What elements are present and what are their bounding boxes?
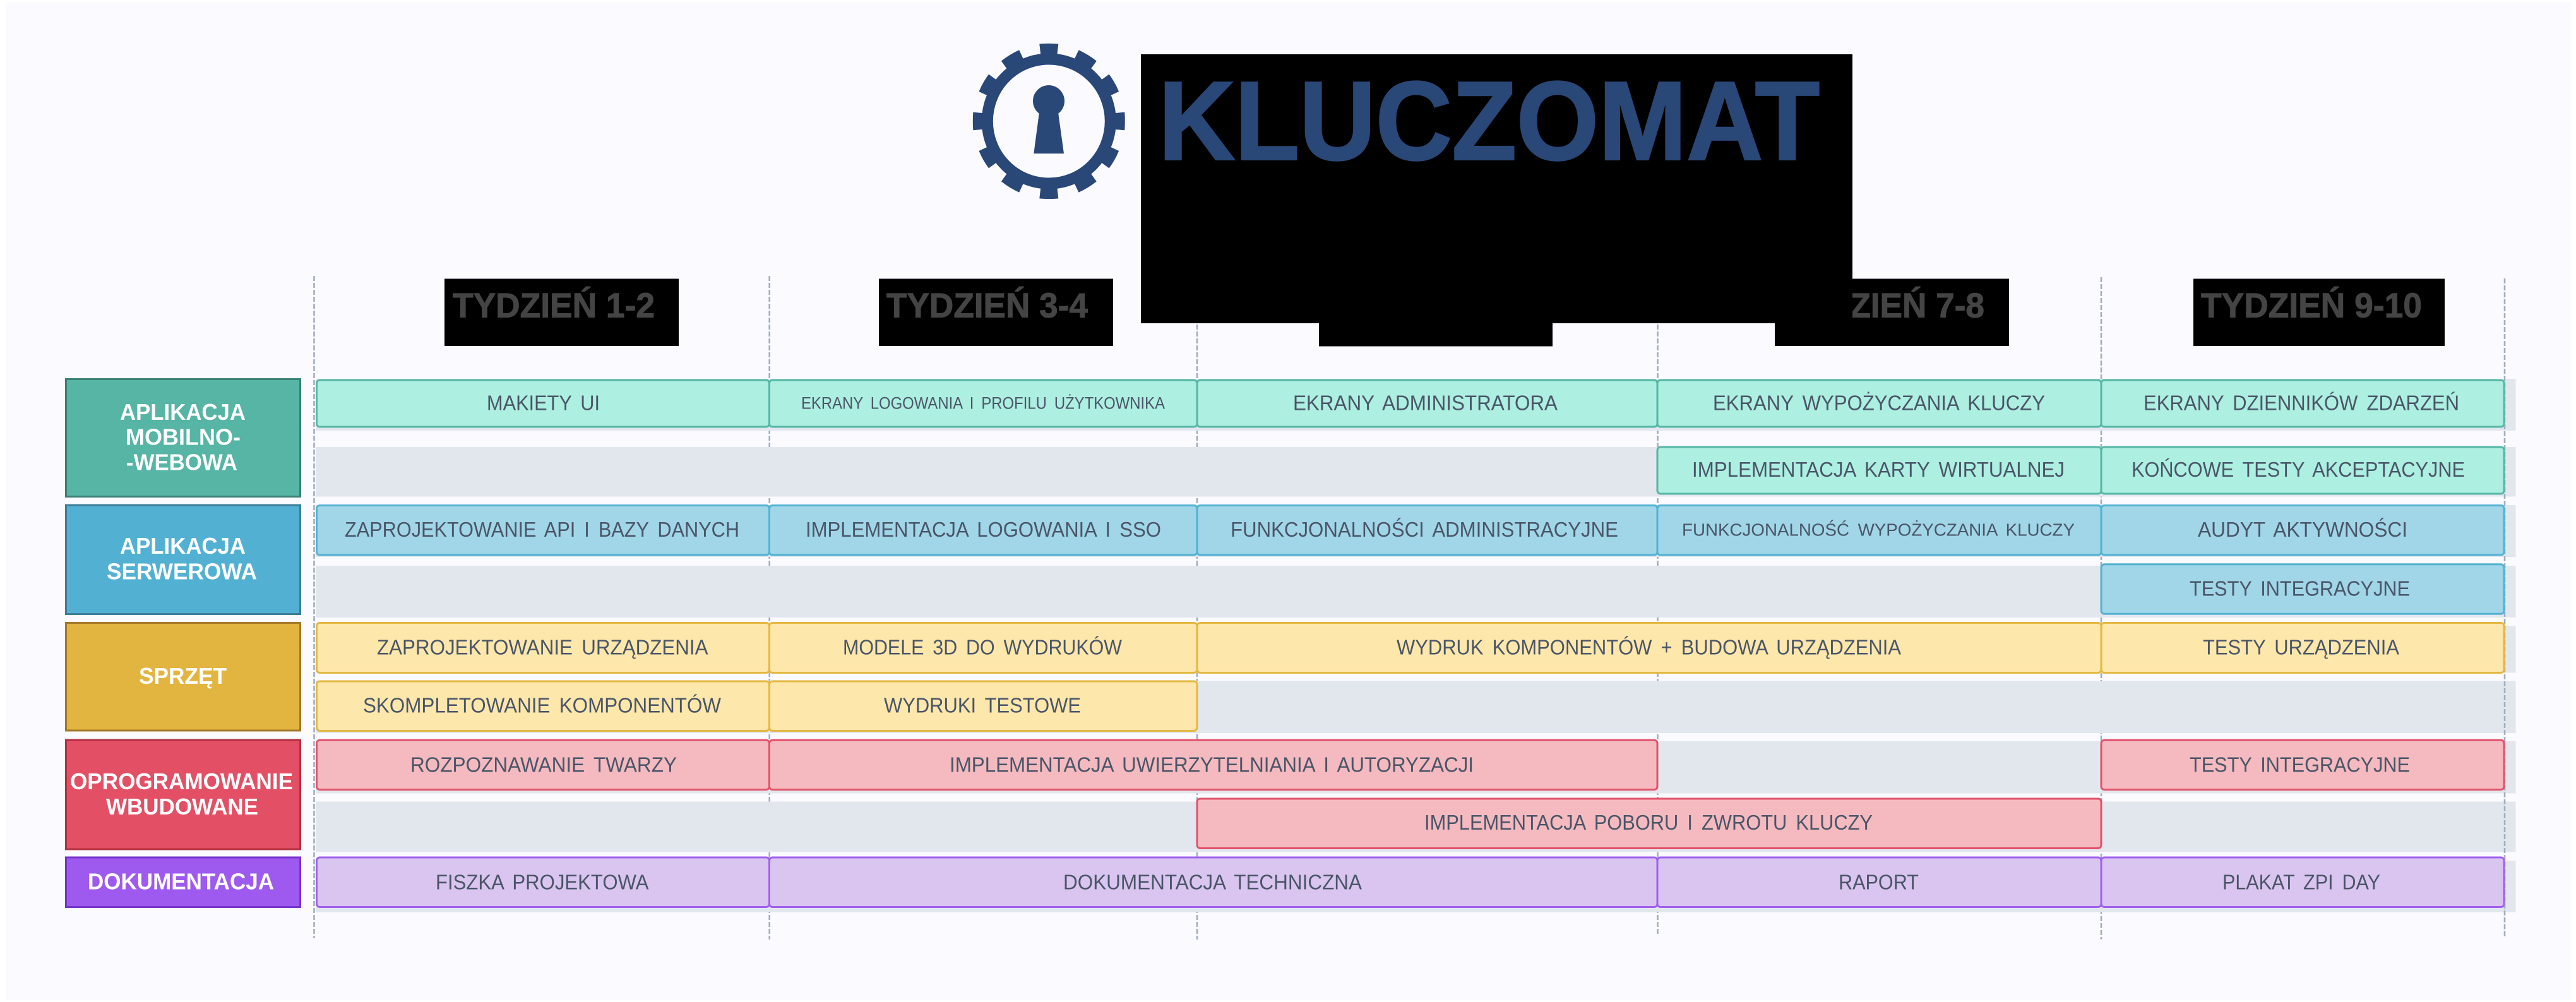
task: TESTY INTEGRACYJNE (serwer): TESTY INTEGRACYJNE [2190, 577, 2410, 601]
task: DOKUMENTACJA TECHNICZNA [769, 857, 1657, 907]
task: FUNKCJONALNOŚCI ADMINISTRACYJNE: FUNKCJONALNOŚCI ADMINISTRACYJNE [1231, 517, 1618, 542]
task: IMPLEMENTACJA KARTY WIRTUALNEJ: IMPLEMENTACJA KARTY WIRTUALNEJ [1692, 458, 2065, 482]
track rows background [316, 379, 2515, 912]
task: FUNKCJONALNOŚCI ADMINISTRACYJNE [1197, 505, 1657, 555]
task: EKRANY LOGOWANIA I PROFILU UŻYTKOWNIKA [769, 380, 1197, 427]
task: TESTY INTEGRACYJNE (oprogramowanie) [2101, 740, 2504, 790]
task: ZAPROJEKTOWANIE URZĄDZENIA [317, 623, 769, 673]
category: DOKUMENTACJA [66, 857, 301, 907]
category: SPRZĘT [66, 623, 301, 731]
task: AUDYT AKTYWNOŚCI: AUDYT AKTYWNOŚCI [2198, 517, 2407, 542]
task: ROZPOZNAWANIE TWARZY: ROZPOZNAWANIE TWARZY [410, 753, 677, 777]
category: OPROGRAMOWANIE WBUDOWANE: WBUDOWANE [106, 794, 258, 820]
task: TESTY URZĄDZENIA [2101, 623, 2504, 673]
task: MODELE 3D DO WYDRUKÓW [769, 623, 1197, 673]
task: SKOMPLETOWANIE KOMPONENTÓW [317, 681, 769, 731]
category: DOKUMENTACJA: DOKUMENTACJA [88, 869, 274, 894]
header: TYDZIEŃ 7-8: TYDZIEŃ 7-8 [1783, 285, 1984, 325]
category: APLIKACJA MOBILNO-WEBOWA: APLIKACJA [120, 399, 246, 425]
category: APLIKACJA SERWEROWA: SERWEROWA [107, 558, 257, 585]
task: KOŃCOWE TESTY AKCEPTACYJNE [2101, 447, 2504, 494]
category: APLIKACJA MOBILNO-WEBOWA [66, 379, 301, 496]
task: FUNKCJONALNOŚĆ WYPOŻYCZANIA KLUCZY [1657, 505, 2101, 555]
task: ZAPROJEKTOWANIE URZĄDZENIA: ZAPROJEKTOWANIE URZĄDZENIA [377, 636, 708, 659]
task: MAKIETY UI: MAKIETY UI [487, 391, 600, 415]
task: TESTY URZĄDZENIA: TESTY URZĄDZENIA [2203, 636, 2400, 659]
task: FISZKA PROJEKTOWA: FISZKA PROJEKTOWA [436, 871, 649, 894]
title: KLUCZOMAT [1159, 58, 1820, 183]
category: APLIKACJA MOBILNO-WEBOWA: MOBILNO- [126, 424, 241, 450]
task: ZAPROJEKTOWANIE API I BAZY DANYCH [317, 505, 769, 555]
task: WYDRUKI TESTOWE: WYDRUKI TESTOWE [884, 695, 1081, 717]
task: WYDRUKI TESTOWE [769, 681, 1197, 731]
category: APLIKACJA SERWEROWA [66, 505, 301, 614]
task: EKRANY DZIENNIKÓW ZDARZEŃ [2101, 380, 2504, 427]
task: IMPLEMENTACJA UWIERZYTELNIANIA I AUTORYZACJI: IMPLEMENTACJA UWIERZYTELNIANIA I AUTORYZACJI [950, 753, 1474, 777]
category: OPROGRAMOWANIE WBUDOWANE: OPROGRAMOWANIE [70, 768, 293, 794]
header: TYDZIEŃ 1-2: TYDZIEŃ 1-2 [453, 285, 655, 325]
title [1141, 54, 1852, 323]
task: EKRANY DZIENNIKÓW ZDARZEŃ: EKRANY DZIENNIKÓW ZDARZEŃ [2144, 391, 2459, 415]
task: IMPLEMENTACJA UWIERZYTELNIANIA I AUTORYZACJI [769, 740, 1657, 790]
task: IMPLEMENTACJA KARTY WIRTUALNEJ [1657, 447, 2101, 494]
category: APLIKACJA MOBILNO-WEBOWA: -WEBOWA [126, 450, 237, 475]
task: IMPLEMENTACJA POBORU I ZWROTU KLUCZY: IMPLEMENTACJA POBORU I ZWROTU KLUCZY [1424, 811, 1873, 835]
task: PLAKAT ZPI DAY: PLAKAT ZPI DAY [2222, 871, 2380, 894]
task: IMPLEMENTACJA LOGOWANIA I SSO: IMPLEMENTACJA LOGOWANIA I SSO [806, 518, 1161, 542]
task: FISZKA PROJEKTOWA [317, 857, 769, 907]
header: TYDZIEŃ 3-4: TYDZIEŃ 3-4 [886, 285, 1088, 325]
task: EKRANY ADMINISTRATORA [1197, 380, 1657, 427]
task: PLAKAT ZPI DAY [2101, 857, 2504, 907]
icon: gear with keyhole logo [973, 44, 1125, 199]
hidden header block under title [1319, 279, 1553, 346]
task: AUDYT AKTYWNOŚCI [2101, 505, 2504, 555]
header: TYDZIEŃ 1-2 [444, 279, 679, 346]
task: IMPLEMENTACJA LOGOWANIA I SSO [769, 505, 1197, 555]
task: KOŃCOWE TESTY AKCEPTACYJNE: KOŃCOWE TESTY AKCEPTACYJNE [2132, 458, 2465, 482]
task: SKOMPLETOWANIE KOMPONENTÓW: SKOMPLETOWANIE KOMPONENTÓW [363, 693, 721, 717]
task: EKRANY ADMINISTRATORA: EKRANY ADMINISTRATORA [1293, 391, 1558, 415]
header: TYDZIEŃ 7-8 [1775, 279, 2009, 346]
task: MAKIETY UI [317, 380, 769, 427]
header: TYDZIEŃ 3-4 [879, 279, 1113, 346]
task: WYDRUK KOMPONENTÓW + BUDOWA URZĄDZENIA [1197, 623, 2101, 673]
task: MODELE 3D DO WYDRUKÓW: MODELE 3D DO WYDRUKÓW [843, 635, 1122, 659]
header: TYDZIEŃ 9-10 [2193, 279, 2445, 346]
category: OPROGRAMOWANIE WBUDOWANE [66, 740, 301, 849]
task: EKRANY LOGOWANIA I PROFILU UŻYTKOWNIKA: EKRANY LOGOWANIA I PROFILU UŻYTKOWNIKA [801, 393, 1165, 413]
task: RAPORT: RAPORT [1839, 871, 1919, 894]
task: TESTY INTEGRACYJNE (serwer) [2101, 564, 2504, 614]
header: TYDZIEŃ 9-10: TYDZIEŃ 9-10 [2201, 285, 2422, 325]
task: DOKUMENTACJA TECHNICZNA: DOKUMENTACJA TECHNICZNA [1063, 871, 1363, 894]
task: RAPORT [1657, 857, 2101, 907]
task: TESTY INTEGRACYJNE (oprogramowanie): TESTY INTEGRACYJNE [2190, 753, 2410, 777]
task: WYDRUK KOMPONENTÓW + BUDOWA URZĄDZENIA: WYDRUK KOMPONENTÓW + BUDOWA URZĄDZENIA [1397, 635, 1902, 659]
task: ZAPROJEKTOWANIE API I BAZY DANYCH: ZAPROJEKTOWANIE API I BAZY DANYCH [345, 518, 739, 542]
category: APLIKACJA SERWEROWA: APLIKACJA [120, 533, 246, 559]
task: EKRANY WYPOŻYCZANIA KLUCZY: EKRANY WYPOŻYCZANIA KLUCZY [1713, 391, 2045, 415]
task: ROZPOZNAWANIE TWARZY [317, 740, 769, 790]
task: FUNKCJONALNOŚĆ WYPOŻYCZANIA KLUCZY: FUNKCJONALNOŚĆ WYPOŻYCZANIA KLUCZY [1682, 519, 2075, 539]
category: SPRZĘT: SPRZĘT [139, 663, 227, 689]
task: EKRANY WYPOŻYCZANIA KLUCZY [1657, 380, 2101, 427]
task: IMPLEMENTACJA POBORU I ZWROTU KLUCZY [1197, 799, 2101, 849]
